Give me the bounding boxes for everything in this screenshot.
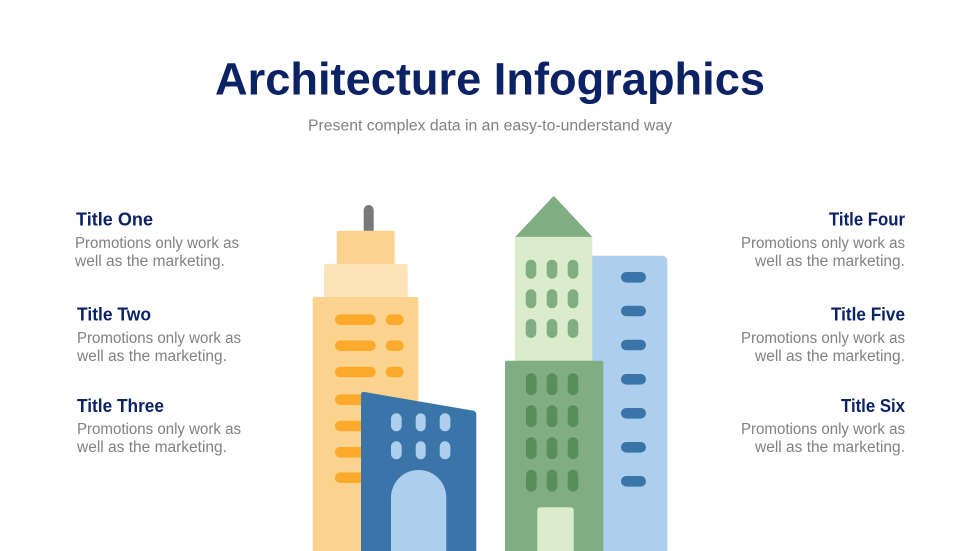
icon: light blue building — [590, 256, 667, 551]
text block: title five: well as the marketing. — [754, 348, 905, 365]
text block: title five — [741, 304, 905, 365]
text block: title one: Title One — [76, 210, 153, 230]
text block: title one: well as the marketing. — [74, 253, 225, 270]
subtitle: Present complex data in an easy-to-understand way — [308, 117, 672, 134]
text block: title two: well as the marketing. — [76, 348, 227, 365]
text block: title two — [76, 304, 241, 365]
text block: title one: Promotions only work as — [75, 235, 239, 252]
icon: green building — [505, 361, 603, 551]
text block: title four — [741, 210, 905, 270]
icon: orange tower — [313, 205, 418, 551]
text block: title four: Promotions only work as — [741, 235, 905, 252]
text block: title three: Title Three — [77, 396, 164, 416]
title: Architecture Infographics — [215, 54, 765, 104]
text block: title five: Title Five — [831, 304, 905, 324]
text block: title three: Promotions only work as — [77, 421, 241, 438]
text block: title three — [76, 396, 241, 456]
text block: title six: well as the marketing. — [754, 439, 905, 456]
text block: title six: Title Six — [841, 396, 905, 416]
text block: title four: Title Four — [829, 210, 905, 230]
text block: title two: Title Two — [77, 304, 151, 324]
text block: title six: Promotions only work as — [741, 421, 905, 438]
text block: title three: well as the marketing. — [76, 439, 227, 456]
text block: title two: Promotions only work as — [77, 330, 241, 347]
text block: title four: well as the marketing. — [754, 253, 905, 270]
text block: title five: Promotions only work as — [741, 330, 905, 347]
icon: blue building — [361, 392, 476, 551]
icon: light green tower — [515, 196, 592, 362]
text block: title one — [74, 210, 239, 270]
text block: title six — [741, 396, 905, 456]
